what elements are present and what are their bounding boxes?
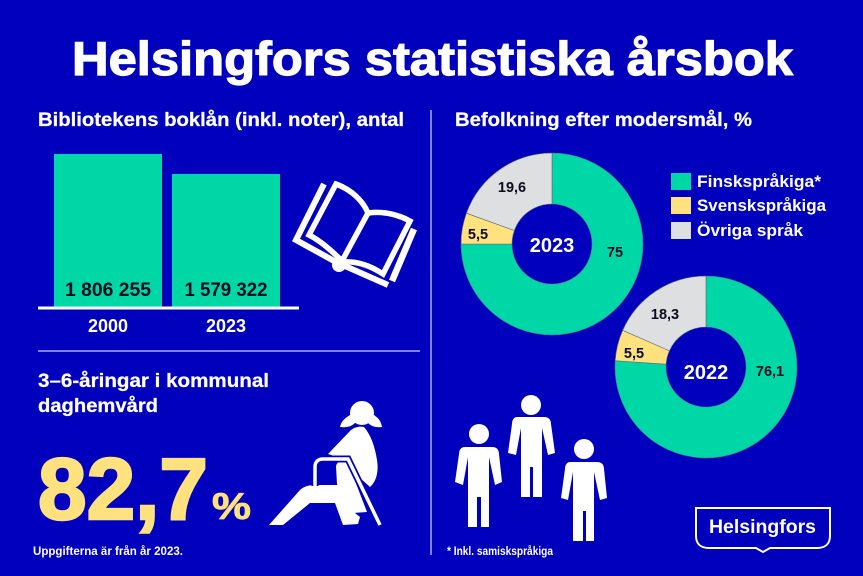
donut chart 2022: 76,1 [756, 364, 784, 380]
icon: child on slide [269, 401, 382, 525]
donut chart 2022: 2022 [684, 362, 728, 384]
percent sign: % [212, 486, 251, 527]
logo: Helsingfors [696, 508, 830, 552]
donut chart 2023: 75 [607, 245, 623, 261]
logo: Helsingfors: Helsingfors [709, 517, 816, 538]
legend: Finskspråkiga* [697, 172, 821, 191]
bar chart [38, 154, 299, 336]
footnote: Sami: * Inkl. samiskspråkiga [447, 546, 554, 558]
bar: 2000: 2000 [88, 316, 128, 336]
title: Helsingfors statistiska årsbok [72, 32, 794, 85]
heading: daycare: daghemvård [38, 396, 158, 417]
bar: 2000: 1 806 255 [65, 280, 151, 301]
donut chart 2023: 2023 [530, 235, 574, 257]
bar: 2023: 1 579 322 [184, 280, 268, 301]
person middle [508, 395, 555, 497]
donut chart 2022 [615, 276, 797, 458]
bar: 2023: 2023 [206, 316, 246, 336]
icon: three people [455, 395, 607, 541]
heading: daycare: 3–6-åringar i kommunal [38, 371, 269, 392]
donut chart 2023 [461, 153, 643, 335]
donut chart 2022: 18,3 [651, 307, 679, 323]
bar: 2000 [54, 154, 162, 336]
donut chart 2022: 5,5 [624, 346, 644, 362]
bar: 2023 [172, 174, 280, 336]
person left [455, 424, 502, 527]
footnote: year: Uppgifterna är från år 2023. [33, 546, 183, 558]
donut chart 2023: 19,6 [498, 180, 526, 196]
legend [671, 172, 827, 240]
panel: population by mother tongue [447, 110, 827, 558]
person right [561, 439, 607, 541]
legend: Övriga språk [697, 221, 804, 240]
big number: 82,7 [38, 441, 208, 538]
heading: population: Befolkning efter modersmål, % [455, 110, 752, 131]
panel: daycare [33, 371, 382, 558]
icon: open book [296, 184, 414, 285]
donut chart 2023: 5,5 [468, 227, 488, 243]
panel: library loans [38, 110, 414, 336]
legend: Svenskspråkiga [697, 196, 827, 215]
heading: library loans: Bibliotekens boklån (inkl. noter), antal [38, 110, 404, 131]
